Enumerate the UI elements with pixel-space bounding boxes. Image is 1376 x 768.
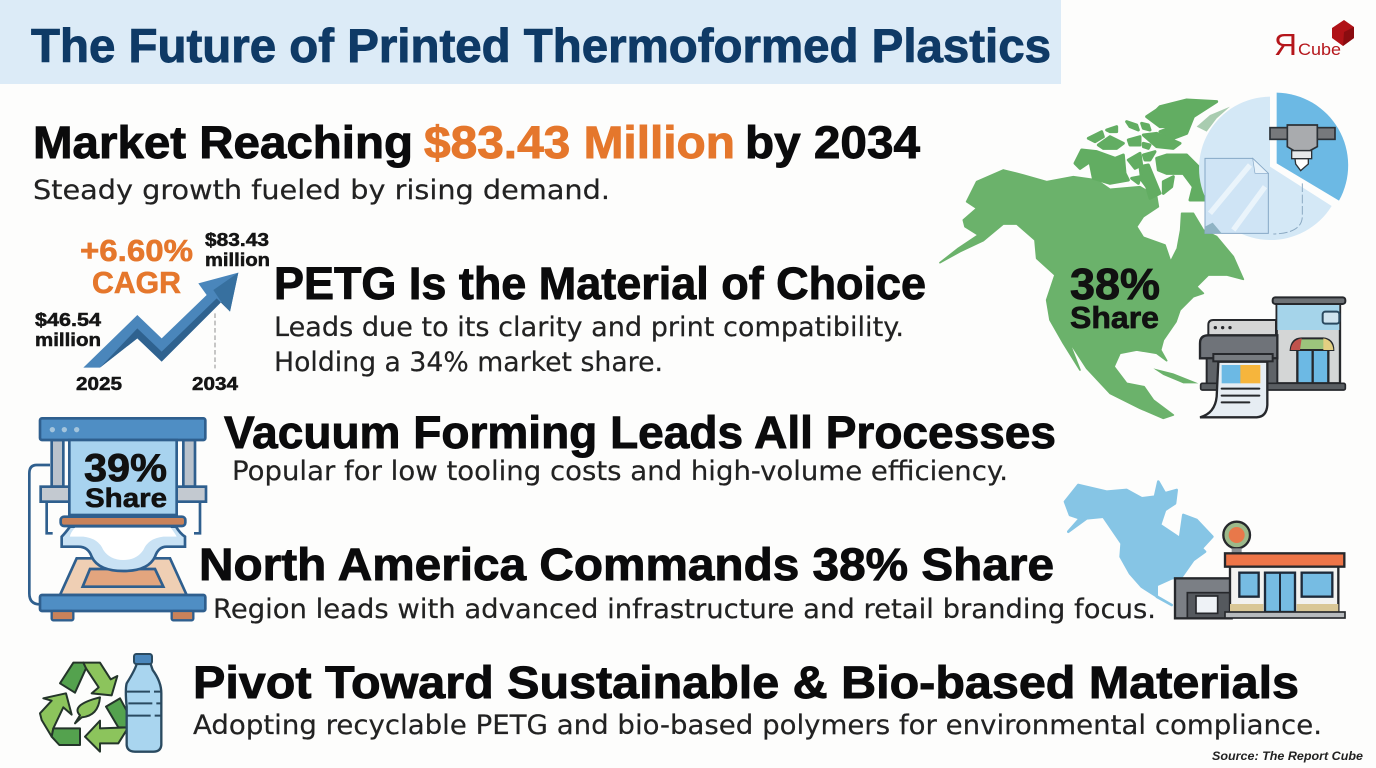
- arctic islands: [1075, 100, 1230, 200]
- text: north america description: Region leads with advanced infrastructure and retail branding focus.: [213, 594, 1156, 625]
- growth chart: million: [35, 330, 101, 350]
- growth chart: [35, 230, 270, 394]
- water bottle: [126, 654, 161, 752]
- text: vacuum forming description: Popular for low tooling costs and high-volume efficiency.: [232, 456, 1008, 487]
- growth chart: 2034: [192, 374, 238, 394]
- heading: market reaching: [33, 117, 920, 168]
- icon: recycling symbol and bottle: [40, 654, 161, 752]
- text: sustainability description: Adopting recyclable PETG and bio-based polymers for environmental compliance.: [193, 710, 1322, 741]
- pie chart with nozzle and sheet: [1199, 93, 1348, 240]
- title banner: [0, 0, 1061, 84]
- icon: printer and shop: [1200, 297, 1345, 417]
- heading: north america: North America Commands 38% Share: [199, 539, 1054, 590]
- heading: vacuum forming: Vacuum Forming Leads All Processes: [224, 407, 1056, 458]
- title banner: The Future of Printed Thermoformed Plastics: [31, 19, 1051, 72]
- logo: RCube: Cube: [1298, 40, 1341, 59]
- growth chart: +6.60%: [80, 233, 193, 268]
- growth chart: CAGR: [92, 265, 181, 300]
- map: North America green with 38% share: Share: [1070, 300, 1159, 335]
- icon: vacuum forming press with 39% share: Share: [85, 483, 167, 513]
- logo: RCube: Я: [1274, 27, 1297, 62]
- text: PETG description: Holding a 34% market share.: [274, 347, 663, 378]
- growth chart: million: [205, 250, 270, 270]
- icon: vacuum forming press with 39% share: 39%: [84, 447, 167, 490]
- source note: Source: The Report Cube: [1212, 749, 1363, 763]
- heading: sustainable materials: Pivot Toward Sustainable & Bio-based Materials: [193, 657, 1299, 708]
- growth chart: $83.43: [205, 230, 269, 250]
- text: market subtitle: Steady growth fueled by rising demand.: [33, 175, 610, 206]
- recycling arrows with leaf: [40, 663, 132, 752]
- text: PETG description: Leads due to its clarity and print compatibility.: [274, 312, 904, 343]
- heading: market reaching: by 2034: [745, 117, 920, 168]
- map: North America green with 38% share: 38%: [1070, 260, 1160, 309]
- heading: PETG: PETG Is the Material of Choice: [274, 258, 926, 309]
- logo: RCube: [1274, 20, 1354, 62]
- growth chart: 2025: [76, 374, 122, 394]
- heading: market reaching: Market Reaching: [33, 117, 413, 168]
- growth chart: $46.54: [35, 310, 101, 330]
- heading: market reaching: $83.43 Million: [424, 117, 735, 168]
- blue map: [1065, 482, 1212, 605]
- map: North America green with 38% share: [940, 93, 1348, 418]
- text: PETG description: [274, 312, 904, 378]
- store and printer: [1175, 522, 1345, 618]
- icon: blue map and retail store: [1065, 482, 1345, 618]
- icon: vacuum forming press with 39% share: [29, 418, 206, 620]
